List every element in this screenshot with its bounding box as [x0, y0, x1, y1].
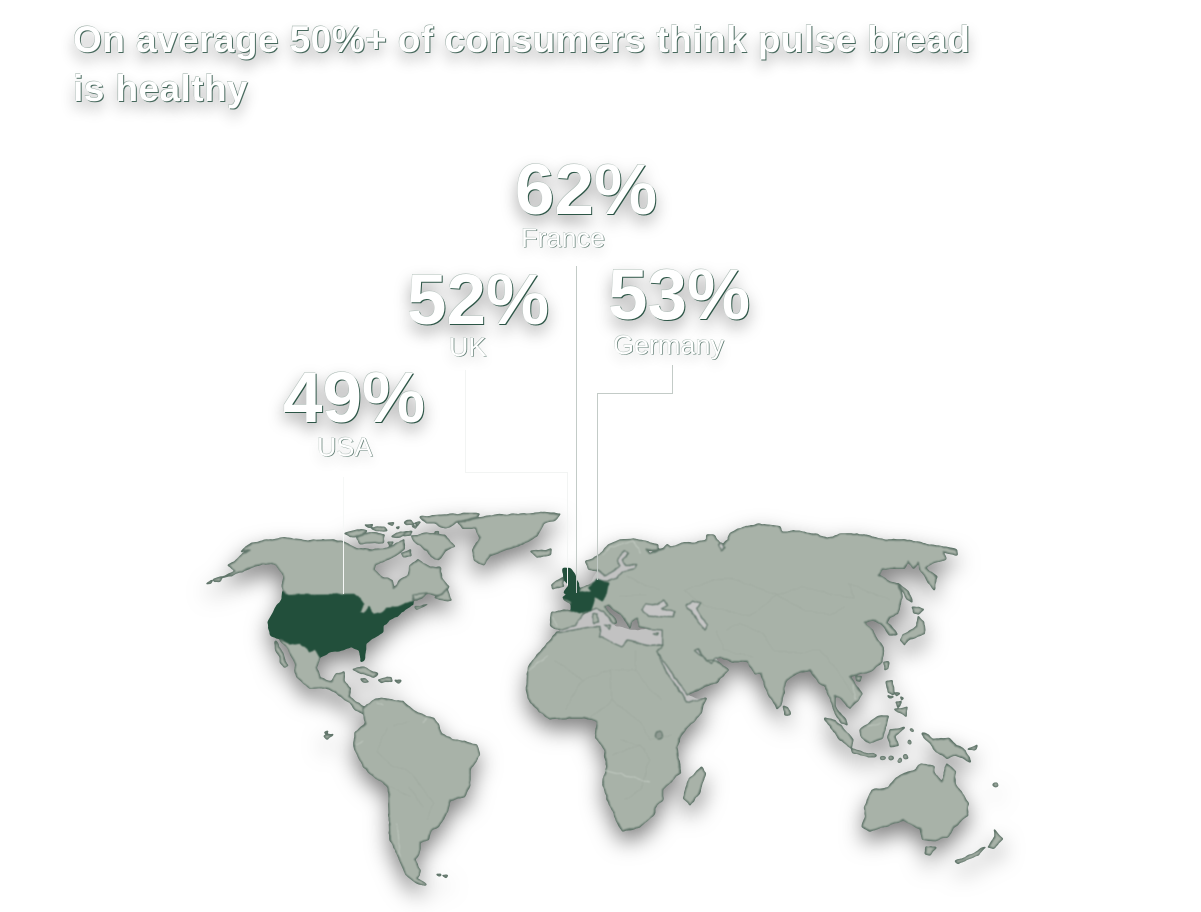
leader line: UK [466, 370, 568, 585]
text: USA [317, 432, 373, 462]
south america [324, 698, 479, 887]
text: France [521, 223, 605, 253]
text: UK [449, 332, 487, 362]
stat: USA [276, 359, 432, 462]
title: On average 50%+ of consumers think pulse bread is healthy [73, 19, 970, 109]
highlighted countries: UK, France, Germany [563, 569, 608, 613]
stat: Germany [602, 256, 757, 360]
stat: France [508, 151, 664, 253]
eurasia [550, 524, 977, 763]
text: Germany [613, 330, 724, 360]
text: 49% [283, 359, 425, 438]
leader line: France [576, 266, 578, 593]
text: 53% [608, 256, 750, 335]
highlighted country: USA [268, 592, 412, 661]
north america [206, 512, 561, 713]
leader line: Germany [598, 365, 672, 580]
australia and oceania [863, 763, 1003, 863]
leader line: USA [342, 477, 344, 594]
africa and madagascar [527, 627, 707, 831]
stat: UK [402, 261, 556, 362]
text: 52% [407, 261, 549, 340]
text: 62% [515, 151, 657, 230]
